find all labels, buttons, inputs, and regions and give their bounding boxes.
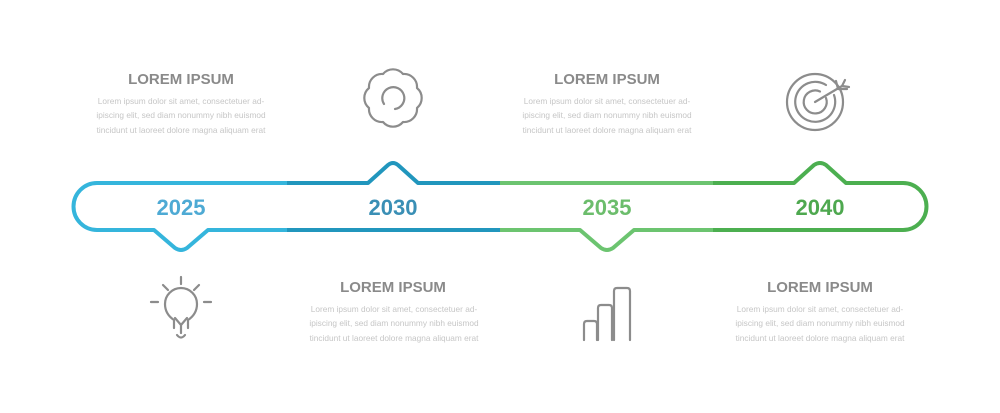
year 2040: 2040 [796, 195, 844, 220]
text block 2: Lorem ipsum dolor sit amet, consectetuer ad- [311, 304, 477, 314]
text block 2: LOREM IPSUM [340, 279, 446, 296]
icon: light bulb [151, 277, 211, 338]
text block 3 [522, 71, 692, 135]
text block 3: ipiscing elit, sed diam nonummy nibh euismod [522, 110, 692, 120]
text block 1 [96, 71, 266, 135]
text block 1: Lorem ipsum dolor sit amet, consectetuer ad- [98, 96, 264, 106]
text block 4: tincidunt ut laoreet dolore magna aliquam erat [736, 333, 905, 343]
year 2025: 2025 [157, 195, 205, 220]
timeline bar [74, 163, 926, 250]
icon: target [787, 74, 849, 130]
text block 2: ipiscing elit, sed diam nonummy nibh euismod [309, 318, 479, 328]
year 2030: 2030 [369, 195, 417, 220]
text block 1: tincidunt ut laoreet dolore magna aliquam erat [97, 125, 266, 135]
text block 2 [309, 279, 479, 343]
text block 3: LOREM IPSUM [554, 71, 660, 88]
text block 4: ipiscing elit, sed diam nonummy nibh euismod [735, 318, 905, 328]
text block 3: Lorem ipsum dolor sit amet, consectetuer ad- [524, 96, 690, 106]
icon: gear [364, 69, 422, 127]
text block 3: tincidunt ut laoreet dolore magna aliquam erat [523, 125, 692, 135]
text block 4: LOREM IPSUM [767, 279, 873, 296]
text block 2: tincidunt ut laoreet dolore magna aliquam erat [310, 333, 479, 343]
text block 4 [735, 279, 905, 343]
text block 1: LOREM IPSUM [128, 71, 234, 88]
text block 4: Lorem ipsum dolor sit amet, consectetuer ad- [737, 304, 903, 314]
icon: bar chart [584, 288, 630, 340]
text block 1: ipiscing elit, sed diam nonummy nibh euismod [96, 110, 266, 120]
year 2035: 2035 [583, 195, 631, 220]
